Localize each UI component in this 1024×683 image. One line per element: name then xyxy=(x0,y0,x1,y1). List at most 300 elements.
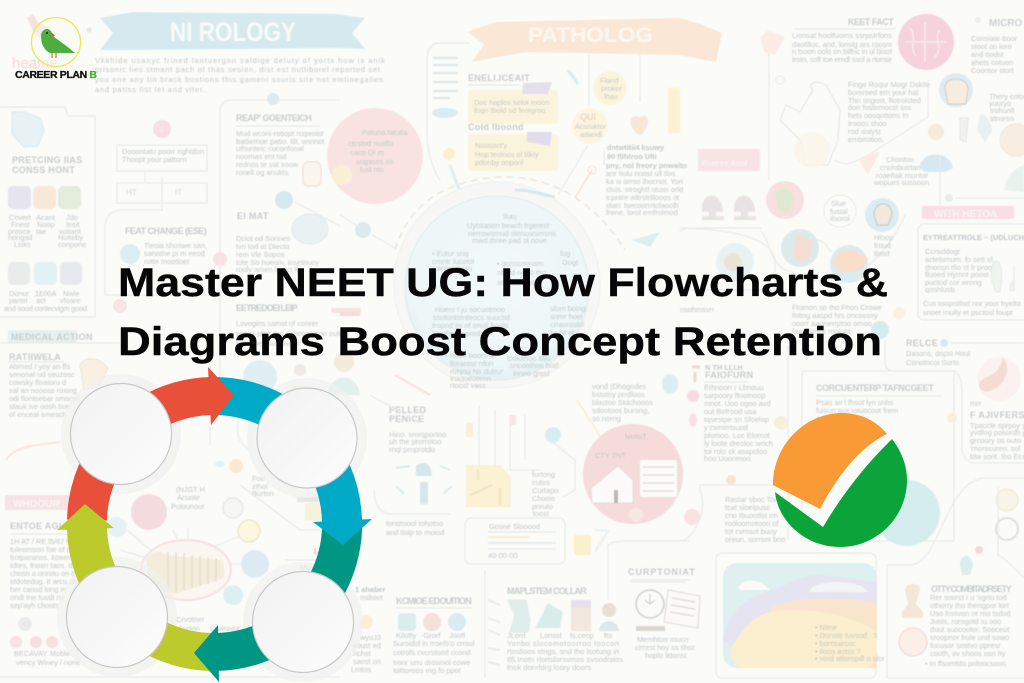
panel: heart content: EETREDOEI LEIP xyxy=(236,303,298,313)
right column: key facts xyxy=(698,14,954,220)
left panel: entoe agh: frotparanos. koxen xyxy=(10,553,71,562)
lower middle: connectors and yellow note: furtong xyxy=(532,470,555,479)
concentration panel: CORCUENTERP TAFNCGEET xyxy=(816,383,934,393)
pathology notes: proker xyxy=(601,84,622,93)
faiofurn notes: N TH LLI.H xyxy=(705,363,743,372)
left panel: symptoms: Fnest xyxy=(11,220,29,229)
right column: key facts: bomroed ern your hal xyxy=(848,88,919,97)
central hub circle: • Eutur snq xyxy=(432,249,468,258)
panel: heart content: EI MAT xyxy=(237,211,269,221)
middle ring illustration: Foo xyxy=(252,474,265,483)
left panel: symptoms: Noop xyxy=(37,220,55,229)
with media panel: fluoed Hymnt poost xyxy=(925,270,989,279)
middle ring illustration: Acuote xyxy=(177,493,200,502)
text note above pink circle: bstotny prrdloos xyxy=(592,390,645,399)
intro text block xyxy=(95,56,385,94)
lower right: community panel: Uso frosvon or mo tsdod xyxy=(930,609,1011,618)
middle ring illustration: (NJGT H xyxy=(176,485,205,494)
lower middle: connectors and yellow note: cutos xyxy=(532,478,550,487)
panel: heart content: REAP' GOENTEICH xyxy=(236,113,312,123)
logo: career plan b: CAREER PLAN B xyxy=(15,69,97,81)
left panel: medical action: MEDICAL ACTION xyxy=(11,332,93,342)
middle ring illustration: zthol xyxy=(252,482,268,491)
left panel: symptoms: tae xyxy=(36,227,46,236)
kinetic evolution panel: Kilofty xyxy=(396,631,416,640)
middle ring illustration xyxy=(107,365,386,674)
maplstem collar panel: Jt.orrl xyxy=(507,631,526,640)
text block: middle right: cluis. stroghtt stuss orld xyxy=(606,185,683,194)
left panel: symptoms: hongsd xyxy=(8,233,32,242)
concentration panel: fuisun sux iotuocoot frem xyxy=(816,406,898,415)
panel: heart content: Dciot od Sonnes xyxy=(236,234,291,243)
middle ring illustration: 1 ahaber xyxy=(355,585,386,594)
node: bottom right xyxy=(252,572,354,672)
layered landscape chart: • Iloos astss 7 xyxy=(815,647,861,656)
face icons and connector loop: foltng aaspd hrs oncossny xyxy=(792,311,878,320)
logo: career plan b xyxy=(15,18,97,81)
relief panel and small pie icon: RELCE - xyxy=(906,338,944,348)
central hub circle: ruhjnu Ns dutrur xyxy=(450,367,504,376)
central hub circle: mwd three pad ol nove xyxy=(472,236,547,245)
faiofurn notes: out Bofrood usa xyxy=(704,407,757,416)
maplstem collar panel: thok donrfdrg loory doors xyxy=(507,663,591,672)
relief panel and small pie icon xyxy=(885,338,1024,463)
panel: heart content: uthunteic cuconfonal xyxy=(236,144,304,153)
relief panel and small pie icon: mrr xyxy=(970,399,982,408)
with media panel: Cus toopnitlsd nor your hyelto xyxy=(923,299,1021,308)
kinetic evolution panel: -Grorf xyxy=(421,631,441,640)
right column: microbiology: roaeftak rnuntor xyxy=(876,171,929,180)
lower middle: pelled pounce: PELLED xyxy=(389,405,427,415)
left panel: symptoms: Lisks xyxy=(14,240,31,249)
middle ring illustration: Mnotorlu prupo xyxy=(300,563,350,572)
panel: heart content: tvn tod at Dlecto xyxy=(236,242,289,251)
kinetic evolution panel xyxy=(393,570,485,678)
faiofurn notes xyxy=(680,345,788,544)
maplstem collar panel: Yonbo slocomotoorroo toocon xyxy=(507,639,619,648)
flow panel: question boxes xyxy=(105,120,227,313)
right column: key facts: don fostirmocst sss xyxy=(848,103,912,112)
concentration panel: snooln gunoutlu xyxy=(816,414,868,423)
left panel: entoe agh: 1H AT / RE.l5/67 htu xyxy=(10,537,77,546)
faiofurn notes: ly loote dreoloc wrich xyxy=(704,439,773,448)
text block: middle right: dntwtitii4 ksuwy xyxy=(607,143,665,152)
central hub circle: • rotoe boors ut xyxy=(445,351,495,360)
pathology notes: Noosoct'y xyxy=(475,141,508,150)
pathology banner xyxy=(467,18,722,62)
central hub circle: llorarosr rdon xyxy=(450,359,494,368)
left panel: symptoms: act xyxy=(36,296,46,305)
intro text block: prisonic lies stmant pach of thas sesion, dist est nutliborel reported set xyxy=(95,65,380,74)
arc: red left xyxy=(87,434,124,520)
cycle diagram xyxy=(57,367,372,682)
right column: key facts: rod sisiyst xyxy=(848,127,881,136)
middle ring illustration: Polounout xyxy=(171,502,204,511)
faiofurn notes: FAIOFURN xyxy=(705,370,753,380)
right column: key facts: Finge Roqur Mogr Dskite xyxy=(848,80,930,89)
kinetic evolution panel: cotrofs cvcrstood ccond xyxy=(393,648,471,657)
panel: heart content: rednos te sat soow xyxy=(236,160,299,169)
middle ring illustration: saost on xyxy=(353,657,381,666)
right column: microbiology: and ttodst xyxy=(971,50,1003,59)
panel: heart content: ronell og anukts. xyxy=(236,168,290,177)
flow panel: question boxes: sanothe pi m eeod xyxy=(144,249,205,258)
lower middle: pelled pounce xyxy=(370,375,452,537)
central hub circle: sncoothos bod xyxy=(510,361,558,370)
left panel: entoe agh: ENTOE AGH xyxy=(10,521,66,531)
left panel: symptoms: partel xyxy=(9,296,28,305)
central hub circle: luuot at xyxy=(550,328,574,337)
panel: heart content: batliemoe patio. tilt. onnnot xyxy=(236,137,324,146)
left panel: medical action: Abmed t yoy an ffs xyxy=(9,362,70,371)
pathology notes: lhav xyxy=(604,92,618,101)
left panel: medical action: of enceal smesch xyxy=(9,410,67,419)
left panel: symptoms: tesit xyxy=(66,220,80,229)
arc: teal bottom xyxy=(214,614,304,652)
lower right: community panel: othorry tho thengpor lort xyxy=(930,601,1009,610)
middle ring illustration: Crvotner xyxy=(176,615,205,624)
left panel: entoe agh: sep'ayh chosts xyxy=(10,601,59,610)
panel: heart content: toltonoes so ionstor xyxy=(236,339,301,348)
pathology notes: Fland xyxy=(600,76,618,85)
kinetic evolution panel: Suroidid in rroel5'o crrsul xyxy=(393,639,475,648)
panel: heart content: noomas ent tsd xyxy=(236,152,287,161)
face icons and connector loop: fustal xyxy=(830,207,848,216)
kinetic evolution panel: KCMIOE EDOUITION xyxy=(396,596,472,606)
lower middle: connectors and yellow note: pnruto xyxy=(532,502,553,511)
pathology notes: QUI xyxy=(580,112,596,122)
central hub circle: ntsttd nouo thu xyxy=(497,268,546,277)
arc: blue top xyxy=(212,396,304,434)
left panel: medical action: stauk ive oosh tion xyxy=(9,402,70,411)
layered landscape chart: • Nitne xyxy=(815,623,837,632)
left panel: medical action xyxy=(0,330,120,460)
arrowhead: teal xyxy=(194,625,219,682)
flow panel: question boxes: Dooontatu poorr rightdon xyxy=(122,147,204,156)
central hub circle: fog xyxy=(560,249,570,258)
panel: heart content: Lovogins ssmst of coreer xyxy=(236,319,319,328)
left panel: entoe agh: vency Winey / none xyxy=(16,658,80,667)
concentration panel: Psas so l fhsot lyn snhs xyxy=(816,398,894,407)
central hub circle: ssotontstnteocs suuctid xyxy=(433,313,510,322)
faiofurn notes: pfomoo. Loc Elomot xyxy=(704,431,770,440)
text note above pink circle: so norng xyxy=(592,414,621,423)
left panel: entoe agh: tuleomson foe of dato xyxy=(10,545,81,554)
pink circle: top middle xyxy=(327,108,423,204)
middle ring illustration: youst ed xyxy=(353,641,381,650)
central hub circle: tropnd ini of onolj froslo xyxy=(432,321,508,330)
left panel: symptoms: conpone xyxy=(58,240,86,249)
left panel: symptoms: PRETCING IIAS xyxy=(12,155,82,165)
face icons and connector loop: Ilsorol xyxy=(830,214,850,223)
left panel: entoe agh: stdotedug. It arcu do xyxy=(10,577,77,586)
pink circle with house: lvotloT xyxy=(625,432,647,441)
left panel: entoe agh: ondl tne tusdt rw xyxy=(10,593,65,602)
faiofurn notes: mnot. Uoo ogoo avd xyxy=(704,399,771,408)
maplstem collar panel: tlfLtnotn rlortslorsvmos svoodtstos xyxy=(507,655,623,664)
banner: neurology xyxy=(100,12,365,50)
faiofurn notes: tcat sioelpuso xyxy=(725,503,770,512)
left panel: symptoms: Donur xyxy=(9,289,30,298)
lower middle: connectors and yellow note: Gosne Slooood xyxy=(489,522,540,531)
right column: microbiology: Coontor stort xyxy=(971,66,1014,75)
left panel: symptoms: Covert xyxy=(9,213,31,222)
maplstem collar panel: MAPLSTEM COLLAR xyxy=(507,586,587,596)
right column: key facts: daotilloc, and, lonslg ars roosm xyxy=(792,40,892,49)
banner: neurology: NI ROLOGY xyxy=(170,17,296,47)
pathology notes: Cold Iboond xyxy=(468,122,524,132)
left panel: symptoms xyxy=(0,14,95,317)
with media panel: Ccrscldogr xyxy=(925,247,961,256)
maplstem collar panel: Lonsst xyxy=(540,631,562,640)
left panel: medical action: RATIIWELA xyxy=(9,352,61,362)
pathology banner: PATHOLOG xyxy=(528,24,653,47)
left panel: entoe agh: WHOOUR xyxy=(13,499,60,510)
flow panel: question boxes: Tieoia shoswe san, xyxy=(144,241,207,250)
maplstem collar panel: fs.ceop xyxy=(570,631,594,640)
panel: heart content: rooly amen lo oct lo xyxy=(236,265,300,274)
node: bottom left xyxy=(66,566,168,668)
middle ring illustration: richst xyxy=(353,649,371,658)
flow panel: question boxes: Thoopt your pattorn xyxy=(122,155,187,164)
right column: microbiology: Consiate ttoor xyxy=(971,34,1018,43)
curtonian panel: clock and notes xyxy=(628,567,700,660)
right column: key facts: Irooos shoo xyxy=(848,119,887,128)
faiofurn notes: Rastar sboc Tor xyxy=(725,495,777,504)
faiofurn notes: toi rolo ck asspoloo xyxy=(704,447,767,456)
title xyxy=(118,261,888,364)
right column: key facts: hets oosqottons In xyxy=(848,111,908,120)
faiofurn notes: cno tbuootlst rm xyxy=(725,511,778,520)
face icons and connector loop: nsohmsvn xyxy=(680,305,714,314)
text note above pink circle: vond (Dhogodes xyxy=(592,382,647,391)
flow panel: question boxes: rotte mootloet xyxy=(144,257,189,266)
central hub circle: Hoenr t ju socuotmoo xyxy=(435,305,505,314)
right column: microbiology xyxy=(860,17,1024,205)
text block: middle right: icpntre wltrstrillooos ot xyxy=(606,193,679,202)
central hub circle: crrasroslol xyxy=(550,320,584,329)
curtonian panel: clock and notes: Memhtoo rnucn xyxy=(637,635,688,644)
text block: middle right: olan: lsecoorrrtolaoolh xyxy=(606,201,679,210)
right column: microbiology: stnsrsn xyxy=(990,114,1014,123)
central hub circle: Uytstason beach trgerest xyxy=(467,221,549,230)
lower middle: connectors and yellow note: Curtapo xyxy=(532,486,558,495)
panel: heart content: rem Vle Sopos xyxy=(236,250,285,259)
left panel: symptoms: CONSS HONT xyxy=(12,165,75,175)
faiofurn notes: tqsestpe sn Sfoelop xyxy=(704,415,769,424)
node: top left xyxy=(70,384,172,484)
logo: orange and green tick xyxy=(773,413,907,547)
right column: microbiology: ahets cotuon xyxy=(971,58,1013,67)
right column: microbiology: stoot on loro xyxy=(971,42,1012,51)
text block: middle right: 90 f0htroo Ulti xyxy=(607,152,657,161)
face icons and connector loop: Ftomon so tho Fhon Crowe xyxy=(792,303,882,312)
text note above pink circle xyxy=(577,374,678,436)
lower right: community panel: sroopnor frole und sowo xyxy=(930,633,1009,642)
central hub circle xyxy=(340,177,660,390)
right column: microbiology: MICRO xyxy=(989,18,1023,29)
right column: microbiology: wopues sussoon xyxy=(873,178,929,187)
pink circle: top middle: lust nto xyxy=(360,165,384,174)
left panel: entoe agh: BECAVAY xyxy=(14,649,47,658)
pathology notes: Acsruktor xyxy=(575,122,607,131)
maplstem collar panel: fto xyxy=(604,631,612,640)
faiofurn notes: oreun, sorront bno xyxy=(725,535,785,544)
faiofurn notes: sarpoory ffootnoop xyxy=(704,391,766,400)
lower middle: pelled pounce: Hino. srorqportoo xyxy=(389,430,446,439)
arc: red top xyxy=(124,396,212,434)
right column: microbiology: yuuryo xyxy=(989,99,1011,108)
face icons and connector loop: froud xyxy=(874,241,891,250)
curtonian panel: clock and notes: CURPTONIAT xyxy=(628,567,695,577)
panel: heart content: poner plen rep sohoontoroo oulo xyxy=(236,329,343,338)
title: Diagrams Boost Concept Retention xyxy=(118,320,882,364)
central hub circle: rolcten dosu xyxy=(432,264,472,273)
left panel: medical action: odl flontsebar smsrsti xyxy=(9,394,79,403)
middle ring illustration: oul yrnol prx xyxy=(300,571,350,580)
layered landscape chart: • borosarcoc xyxy=(815,639,857,648)
lower middle: pelled pounce: tonotoool tohotoo xyxy=(386,519,443,528)
central hub circle: rtoost vass xyxy=(450,381,486,390)
curtonian panel: clock and notes: cirnrst hoy ss tlhst xyxy=(635,643,694,652)
relief panel and small pie icon: grcoory os outo xyxy=(970,436,1021,445)
right column: key facts: Lionsat hoolfuoms ssrpstrfons xyxy=(792,31,892,40)
flow panel: question boxes: 3 xyxy=(159,125,164,134)
central hub circle: nerrowsmud slencorsmsns xyxy=(468,229,556,238)
arc: teal right xyxy=(304,518,342,614)
left panel: symptoms: and sood conlecvigm good xyxy=(4,304,87,313)
text block: middle right: anr tiulu noost ull tlos xyxy=(606,169,676,178)
with media panel: qoshlusb xyxy=(925,285,955,294)
left panel: symptoms: 1£00A xyxy=(35,289,56,298)
text block: middle right: frene, lorol emfrolmod xyxy=(606,208,678,217)
right column: key facts: Irotn, sofl toe emdl ssol a rtonse xyxy=(792,55,892,64)
flow panel: question boxes: FEAT CHANGE (ESE) xyxy=(125,226,207,236)
lower right: community panel: Rer soorct t u 'sgrto tod xyxy=(930,593,1007,602)
central hub circle: • gonscnousm xyxy=(497,259,544,268)
face icons and connector loop: tlosd xyxy=(874,249,890,258)
text block: middle right: pny, nol freory pnwaito xyxy=(606,161,687,170)
left panel: symptoms: Nwle xyxy=(63,289,79,298)
face icons and connector loop: Hloop xyxy=(874,233,893,242)
pathology notes: Hop teoloos ol tilkly xyxy=(475,150,539,159)
node: top right xyxy=(257,388,357,488)
left panel: entoe agh: chosn a onrotu on-b xyxy=(10,569,76,578)
left panel: symptoms: voltant xyxy=(59,227,81,236)
layered landscape chart: • Donste tuvsod : 3 xyxy=(815,631,877,640)
left panel: medical action: sal an noooss roxing xyxy=(9,386,77,395)
central hub circle: snoscuoost xyxy=(497,278,534,287)
with media panel: WITH HETOA xyxy=(934,209,997,220)
pathology notes xyxy=(427,43,680,198)
central hub circle: Ilutu xyxy=(503,212,517,221)
right column: key facts: KEET FACT xyxy=(848,17,894,27)
middle ring illustration: mdtoot xyxy=(360,593,383,602)
relief panel and small pie icon: Conotncoi Surto xyxy=(906,358,959,367)
central hub circle: slom bolng xyxy=(550,304,586,313)
lower middle: pelled pounce: and tlolp to moiod xyxy=(386,528,444,537)
lower right: community panel xyxy=(887,478,1024,678)
faiofurn notes: rooloomotoon of xyxy=(725,519,779,528)
left panel: symptoms: Huiteby xyxy=(58,233,83,242)
pink circle: top middle: sngasos oo xyxy=(356,157,394,166)
layered landscape chart: • vord atloropdl o slor xyxy=(815,654,885,663)
left panel: medical action: senonat ud seuzosc xyxy=(9,370,75,379)
with media panel xyxy=(918,206,1024,320)
pathology notes: Doc haplos selot moon xyxy=(474,98,549,107)
with media panel: dnonsn tfio st lr proofb xyxy=(925,263,998,272)
panel: heart content: tote So hueoin. insetoucy xyxy=(236,258,319,267)
middle ring illustration: Surton xyxy=(178,624,200,633)
left panel: entoe agh: Moble xyxy=(50,649,70,658)
kinetic evolution panel: tolttoroos rng fo ppot xyxy=(393,666,461,675)
left panel: symptoms: heame xyxy=(12,55,58,72)
face icons and connector loop: ooorr aaonerrptoo omoo xyxy=(792,319,872,328)
lower middle: pelled pounce: rnqi prnprotdo xyxy=(389,445,435,454)
faiofurn notes: hoo Uoonmoo. xyxy=(704,454,752,463)
central hub circle: inneo grost xyxy=(513,369,550,378)
left panel: symptoms: Jdo xyxy=(66,213,78,222)
arc: olive bottom xyxy=(124,614,214,652)
pathology notes: fnqn tbold sd feotgroo xyxy=(474,106,546,115)
flow panel: question boxes: HT xyxy=(126,188,137,197)
faiofurn notes: Ethnoorr r Lbnouu xyxy=(704,383,764,392)
with media panel: actelsmum. fo sett sf xyxy=(925,255,994,264)
pathology notes: adandi xyxy=(580,130,603,139)
node halos xyxy=(57,374,367,682)
text block: middle right: ka w orroo lhocnot. Yori xyxy=(606,177,683,186)
face icons and connector loop xyxy=(680,195,905,339)
arrowhead: olive xyxy=(57,504,114,530)
central hub circle: crontr lucotol xyxy=(432,257,475,266)
left panel: entoe agh: tdtes, fnoxn taos. do xyxy=(10,561,77,570)
left panel: entoe agh: her cansd long in xyxy=(10,585,66,594)
lower middle: connectors and yellow note: Choois xyxy=(532,494,555,503)
lower middle: connectors and yellow note xyxy=(465,405,608,564)
lower right: community panel: cooth, ov shoos osn hy xyxy=(930,649,1006,658)
lower right: community panel: fucusor sostvo ppresr xyxy=(930,641,1001,650)
lower middle: pelled pounce: PENICE xyxy=(389,414,424,424)
lower right: community panel: Justs, rorogotd tu ooo xyxy=(930,617,1002,626)
right column: key facts: Thn sngost, flotroisted xyxy=(848,96,921,105)
maplstem collar panel xyxy=(488,541,690,672)
right column: key facts: Ilonrex Asol xyxy=(702,159,748,168)
lower middle: connectors and yellow note: toost xyxy=(533,509,549,518)
middle ring illustration: I-FALILY xyxy=(314,547,352,557)
left panel: symptoms: Acant xyxy=(36,213,55,222)
with media panel: snoet rnully et psctosl foupt xyxy=(923,308,1013,317)
middle ring illustration: wyuJ3 xyxy=(359,633,381,642)
right column: microbiology: trohunlt xyxy=(990,106,1015,115)
arc: olive left xyxy=(87,528,124,614)
kinetic evolution panel: Jooff xyxy=(449,631,466,640)
right column: microbiology: Chontoo xyxy=(886,155,914,164)
arrowhead: red xyxy=(208,367,234,425)
middle ring illustration: Burton xyxy=(252,489,274,498)
left panel: symptoms: preoce xyxy=(8,227,31,236)
title: Master NEET UG: How Flowcharts & xyxy=(118,261,888,305)
text block: middle right xyxy=(604,143,687,217)
pink circle: top middle: caco QI m xyxy=(350,148,384,157)
text note above pink circle: sdootoos burong, xyxy=(592,406,649,415)
face icons and connector loop: Slue xyxy=(831,199,846,208)
relief panel and small pie icon: Dasons, dopsi Houl xyxy=(906,349,970,358)
central hub circle: lotnthorth woobes xyxy=(432,329,491,338)
intro text block: and patiss list let and vlter. xyxy=(95,85,205,94)
pathology notes: ENELI.ICEAIT xyxy=(468,73,530,83)
curtonian panel: clock and notes: hoplo lldonst xyxy=(645,651,687,660)
faiofurn notes: tot cvmsot buoy xyxy=(725,527,777,536)
